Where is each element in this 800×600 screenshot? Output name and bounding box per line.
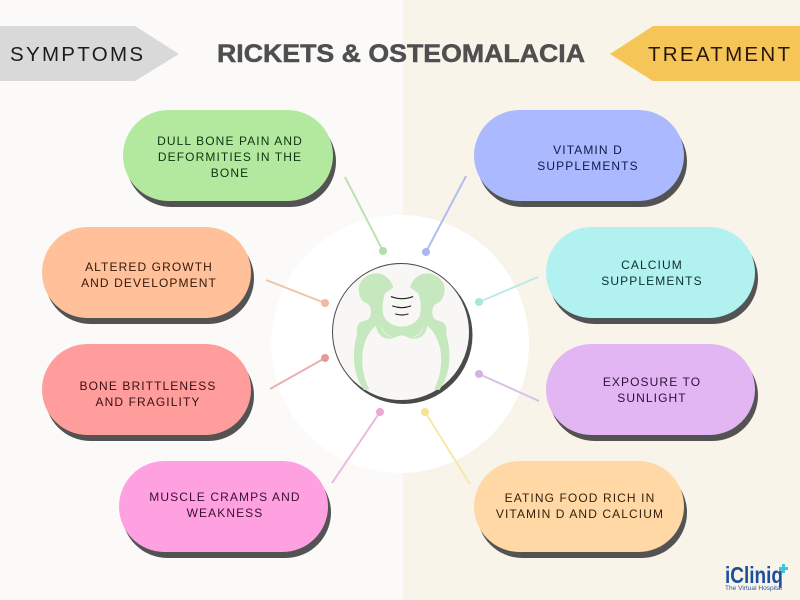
pill: altered growth <box>42 227 254 324</box>
pill: eating food: VITAMIN D AND CALCIUM <box>496 507 664 521</box>
pill: dull bone pain: DEFORMITIES IN THE <box>158 150 302 164</box>
pill: bone brittleness: BONE BRITTLENESS <box>80 379 216 393</box>
logo: iCliniq: The Virtual Hospital <box>725 585 783 592</box>
pill: exposure to sunlight: EXPOSURE TO <box>603 375 701 389</box>
pill: vitamin D supplements: VITAMIN D <box>553 143 623 157</box>
pill: muscle cramps: MUSCLE CRAMPS AND <box>149 490 301 504</box>
pill: dull bone pain: BONE <box>211 166 249 180</box>
pill: calcium supplements: SUPPLEMENTS <box>601 274 703 288</box>
pill: bone brittleness: AND FRAGILITY <box>96 395 200 409</box>
treatment banner <box>610 26 800 81</box>
connector: altered growth <box>266 280 329 307</box>
pill: exposure to sunlight: SUNLIGHT <box>617 391 687 405</box>
pill: altered growth: AND DEVELOPMENT <box>81 276 217 290</box>
connector: food <box>421 408 470 484</box>
connector: vitamin D <box>422 176 466 256</box>
pill: altered growth: ALTERED GROWTH <box>85 260 213 274</box>
title: RICKETS & OSTEOMALACIA <box>217 40 585 68</box>
pill: dull bone pain <box>123 110 336 207</box>
pill: exposure to sunlight <box>546 344 758 441</box>
logo: iCliniq: iCliniq <box>725 562 783 588</box>
treatment banner: TREATMENT <box>648 43 790 66</box>
symptoms banner: SYMPTOMS <box>10 43 143 66</box>
pill: muscle cramps <box>119 461 331 558</box>
icon: pelvis <box>354 273 449 390</box>
connector: brittleness <box>270 354 329 389</box>
pill: eating food <box>474 461 687 558</box>
central pelvis badge <box>332 264 472 404</box>
connector: sunlight <box>475 370 539 401</box>
pill: calcium supplements: CALCIUM <box>621 258 683 272</box>
central white circle <box>271 215 529 473</box>
pill: dull bone pain: DULL BONE PAIN AND <box>157 134 303 148</box>
pill: muscle cramps: WEAKNESS <box>187 506 263 520</box>
connector: muscle cramps <box>332 408 384 483</box>
pill: vitamin D supplements <box>474 110 687 207</box>
pill: vitamin D supplements: SUPPLEMENTS <box>537 159 639 173</box>
connector: calcium <box>475 277 538 306</box>
pill: eating food: EATING FOOD RICH IN <box>505 491 655 505</box>
pill: calcium supplements <box>546 227 758 324</box>
connector: dull bone pain <box>345 177 387 255</box>
symptoms banner <box>0 26 179 81</box>
pill: bone brittleness <box>42 344 254 441</box>
